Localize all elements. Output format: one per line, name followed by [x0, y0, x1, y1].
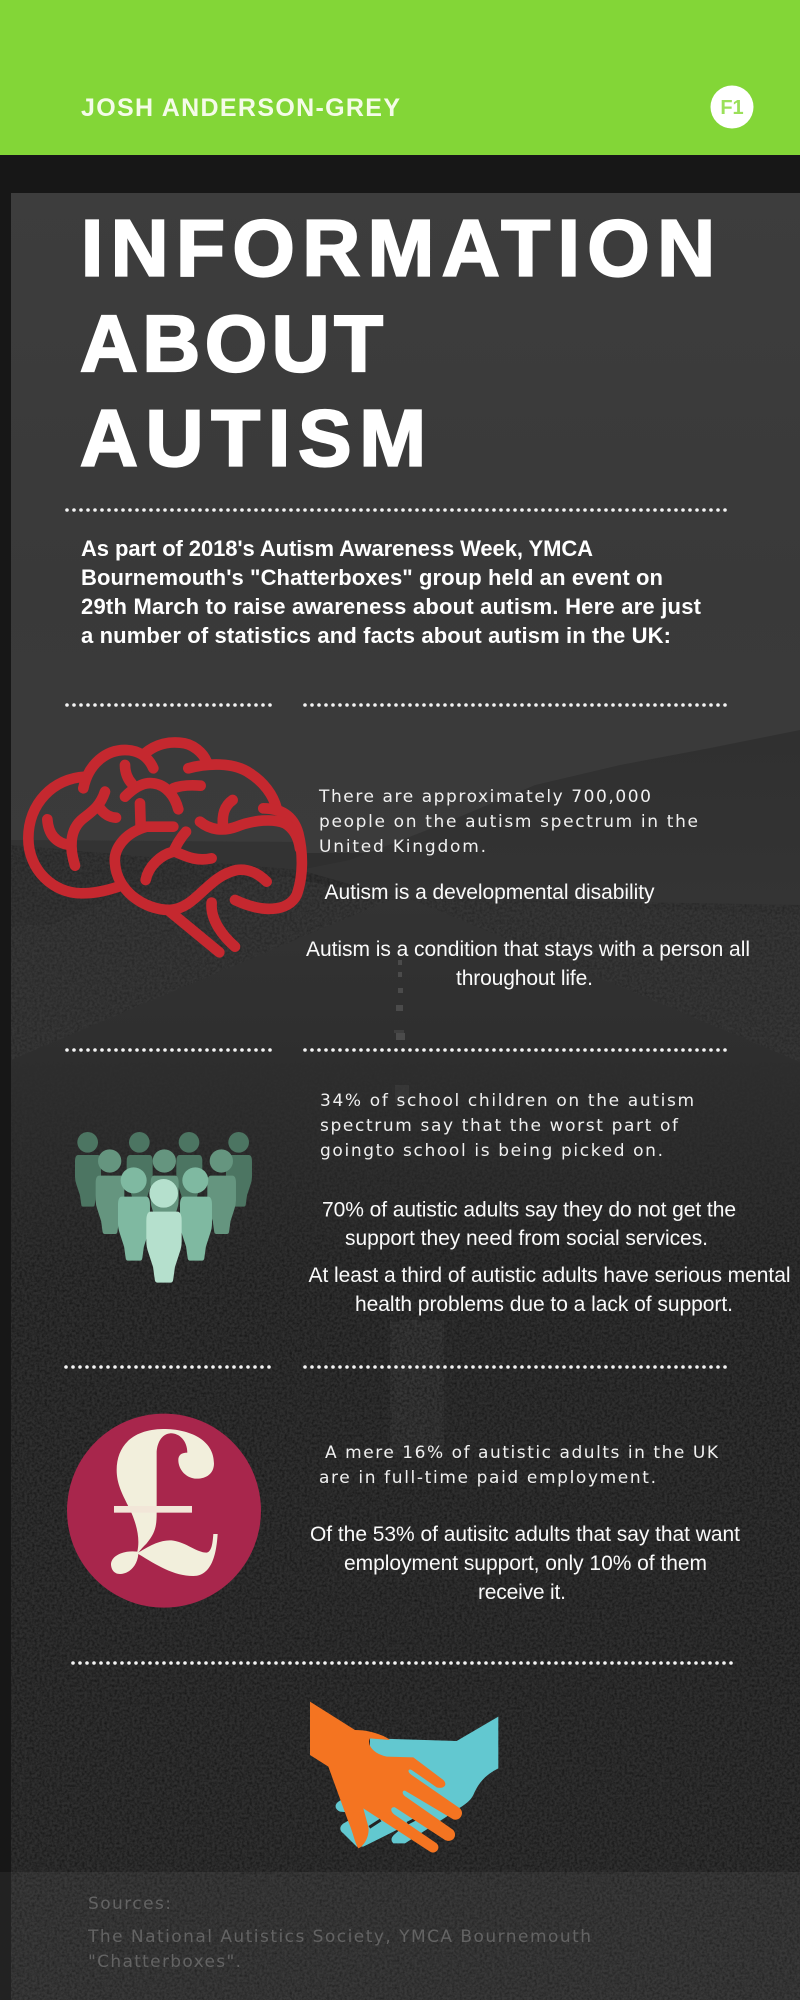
asphalt grain: [11, 820, 800, 2000]
text block: mental health statistic: health problems due to a lack of support.: [355, 1293, 733, 1316]
intro text block: Bournemouth's "Chatterboxes" group held an event on: [81, 565, 663, 590]
sources text: The National Autistics Society, YMCA Bournemouth: [87, 1927, 591, 1947]
sources text: "Chatterboxes".: [88, 1952, 241, 1972]
text block: spectrum statistic: There are approximately 700,000: [318, 787, 651, 807]
text block: social services statistic: support they need from social services.: [345, 1227, 708, 1250]
text block: employment statistic: A mere 16% of autistic adults in the UK: [325, 1443, 719, 1463]
intro text block: [81, 536, 702, 648]
hills on the horizon: [300, 730, 800, 915]
sources heading: Sources:: [88, 1894, 171, 1914]
text block: employment support statistic: [310, 1523, 740, 1604]
intro text block: a number of statistics and facts about autism in the UK:: [81, 623, 671, 648]
icon: brain: [28, 742, 302, 952]
text block: mental health statistic: At least a third of autistic adults have serious mental: [308, 1264, 790, 1287]
author name: JOSH ANDERSON-GREY: [81, 94, 400, 122]
title: AUTISM: [80, 394, 426, 482]
text block: spectrum statistic: people on the autism spectrum in the: [319, 812, 698, 832]
icon: group of people: [75, 1132, 252, 1283]
panel: green header: [0, 0, 800, 155]
title: [80, 204, 715, 482]
text block: social services statistic: 70% of autistic adults say they do not get the: [322, 1198, 736, 1222]
road surface: [11, 900, 800, 2000]
text block: lifelong condition: throughout life.: [456, 967, 593, 990]
icon: pound sign: [67, 1414, 261, 1608]
fields beside the road: [11, 840, 800, 1065]
badge: F1: F1: [720, 97, 744, 119]
text block: employment support statistic: Of the 53% of autisitc adults that say that want: [310, 1523, 740, 1546]
badge: F1: [710, 86, 754, 128]
text block: employment statistic: [319, 1443, 719, 1488]
intro text block: As part of 2018's Autism Awareness Week, YMCA: [81, 536, 593, 561]
text block: lifelong condition: Autism is a condition that stays with a person all: [306, 938, 750, 961]
intro text block: 29th March to raise awareness about autism. Here are just: [81, 594, 702, 619]
sources text: [87, 1927, 591, 1972]
panel: sources footer: [0, 1872, 800, 2000]
icon: handshake: [310, 1702, 498, 1853]
title: ABOUT: [80, 299, 383, 388]
centre road markings: [394, 960, 409, 1103]
text block: employment support statistic: employment support, only 10% of them: [344, 1552, 707, 1575]
text block: social services statistic: [322, 1198, 736, 1250]
text block: spectrum statistic: United Kingdom.: [319, 837, 486, 857]
text block: mental health statistic: [308, 1264, 790, 1316]
text block: lifelong condition: [306, 938, 750, 990]
text block: school children statistic: goingto school is being picked on.: [320, 1141, 663, 1161]
text block: school children statistic: 34% of school children on the autism: [320, 1091, 694, 1111]
text block: spectrum statistic: [318, 787, 698, 857]
title: INFORMATION: [81, 204, 715, 292]
text block: developmental disability: Autism is a developmental disability: [324, 881, 655, 904]
text block: employment support statistic: receive it.: [478, 1581, 566, 1604]
text block: employment statistic: are in full-time paid employment.: [319, 1468, 656, 1488]
text block: school children statistic: [320, 1091, 694, 1161]
text block: school children statistic: spectrum say that the worst part of: [320, 1116, 679, 1136]
